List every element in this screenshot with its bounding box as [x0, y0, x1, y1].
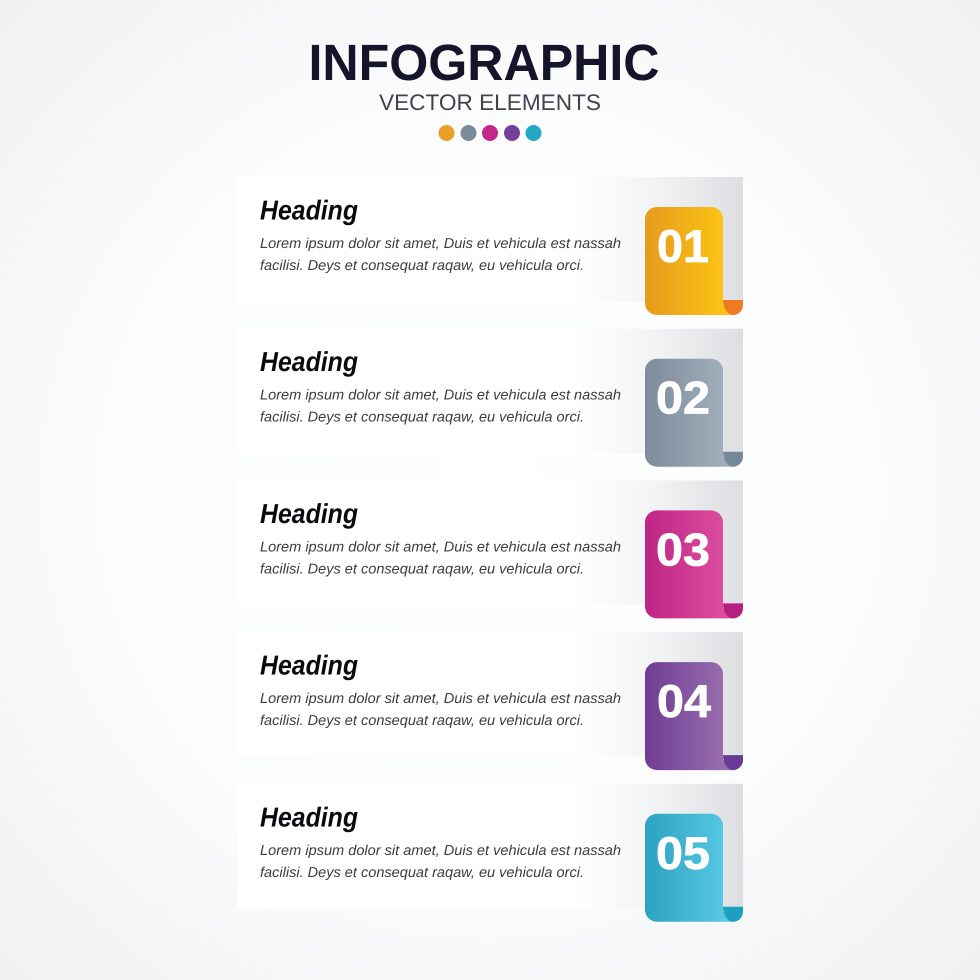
- badge 03: [645, 510, 733, 618]
- panel: step 02: [237, 329, 743, 467]
- subtitle: VECTOR ELEMENTS: [379, 90, 601, 115]
- number 03: 03: [656, 523, 710, 575]
- title: INFOGRAPHIC: [308, 34, 660, 91]
- heading 04: Heading: [260, 650, 358, 681]
- text block 04: [260, 691, 621, 729]
- panel: step 05: [237, 784, 743, 922]
- heading 05: Heading: [260, 801, 358, 832]
- badge 04: [645, 662, 733, 770]
- fold 03: [723, 603, 743, 618]
- text block 05: Lorem ipsum dolor sit amet, Duis et vehicula est nassah: [260, 843, 621, 859]
- colour dots: [438, 125, 542, 141]
- text block 04: facilisi. Deys et consequat raqaw, eu vehicula orci.: [260, 713, 584, 729]
- text block 03: [260, 539, 621, 577]
- text block 02: Lorem ipsum dolor sit amet, Duis et vehicula est nassah: [260, 388, 621, 404]
- heading 02: Heading: [260, 346, 358, 377]
- number 05: 05: [656, 827, 710, 879]
- text block 04: Lorem ipsum dolor sit amet, Duis et vehicula est nassah: [260, 691, 621, 707]
- text block 03: Lorem ipsum dolor sit amet, Duis et vehicula est nassah: [260, 539, 621, 555]
- number 04: 04: [657, 675, 711, 727]
- number 02: 02: [656, 372, 710, 424]
- heading 01: Heading: [260, 194, 358, 226]
- panel: step 01: [237, 177, 743, 315]
- text block 05: facilisi. Deys et consequat raqaw, eu vehicula orci.: [260, 865, 584, 881]
- panel: step 03: [237, 480, 743, 618]
- text block 02: [260, 388, 621, 426]
- fold 02: [723, 452, 743, 467]
- text block 01: [260, 236, 621, 274]
- text block 01: facilisi. Deys et consequat raqaw, eu vehicula orci.: [260, 258, 584, 274]
- text block 03: facilisi. Deys et consequat raqaw, eu vehicula orci.: [260, 561, 584, 577]
- text block 02: facilisi. Deys et consequat raqaw, eu vehicula orci.: [260, 410, 584, 426]
- badge 05: [645, 814, 733, 922]
- text block 01: Lorem ipsum dolor sit amet, Duis et vehicula est nassah: [260, 236, 621, 252]
- fold 05: [723, 907, 743, 922]
- panel: step 04: [237, 632, 743, 770]
- badge 02: [645, 359, 733, 467]
- number 01: 01: [657, 220, 709, 272]
- heading 03: Heading: [260, 498, 358, 529]
- badge 01: [645, 207, 733, 315]
- fold 01: [723, 300, 743, 315]
- text block 05: [260, 843, 621, 881]
- fold 04: [723, 755, 743, 770]
